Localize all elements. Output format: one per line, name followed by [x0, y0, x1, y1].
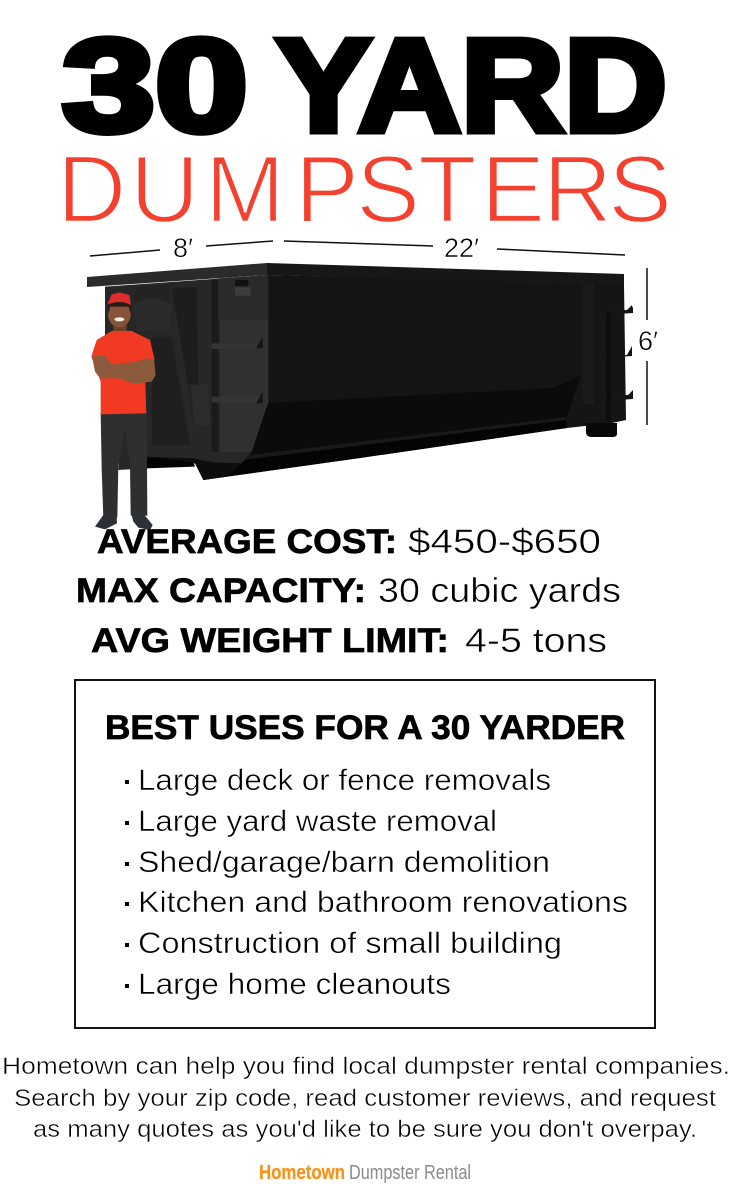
closing paragraph: Search by your zip code, read customer reviews, and request — [14, 1085, 716, 1112]
bullet list: Large yard waste removal — [138, 805, 497, 838]
title: 30 YARD — [62, 12, 667, 159]
stat: average cost: $450-$650 — [408, 523, 601, 561]
dimension: width 8 feet: 8′ — [173, 233, 193, 263]
stat: weight limit: 4-5 tons — [465, 622, 607, 660]
bullet list: Shed/garage/barn demolition — [138, 846, 550, 879]
dumpster long side — [203, 275, 624, 480]
red cap — [107, 292, 131, 305]
right end frame — [566, 283, 626, 423]
crossed arms — [92, 355, 156, 384]
logo: Hometown Dumpster Rental: Dumpster Rental — [349, 1162, 471, 1184]
stat: average cost — [97, 523, 601, 561]
dumpster illustration — [87, 263, 633, 480]
neck — [113, 323, 127, 335]
jeans — [101, 411, 147, 518]
bottom rail — [203, 420, 567, 480]
bullet list: Large home cleanouts — [138, 968, 451, 1001]
dumpster end face — [105, 275, 268, 480]
logo: Hometown Dumpster Rental — [259, 1162, 471, 1184]
title: 30 YARD: YARD — [276, 12, 667, 159]
closing paragraph: Hometown can help you find local dumpster rental companies. — [2, 1053, 730, 1080]
title: 30 YARD: 30 — [62, 12, 248, 159]
bullet list — [125, 764, 628, 1001]
dimension: length 22 feet — [284, 233, 625, 263]
closing paragraph — [2, 1053, 730, 1143]
logo: Hometown Dumpster Rental: Hometown — [259, 1162, 345, 1184]
red shirt — [91, 331, 155, 414]
closing paragraph: as many quotes as you'd like to be sure you don't overpay. — [33, 1116, 697, 1143]
head — [108, 299, 131, 327]
bullet list: Construction of small building — [138, 927, 562, 960]
panel heading: BEST USES FOR A 30 YARDER — [105, 709, 625, 747]
shoes — [95, 515, 117, 529]
panel border — [75, 680, 655, 1028]
stat: max capacity — [76, 572, 621, 610]
stat: weight limit — [91, 622, 607, 660]
panel: best uses — [75, 680, 655, 1028]
bullet list: Large deck or fence removals — [138, 764, 551, 797]
stat: average cost: AVERAGE COST: — [97, 523, 397, 561]
dimension: height 6 feet: 6′ — [638, 326, 658, 356]
person in red shirt — [91, 292, 156, 530]
lower sloped panel — [242, 376, 580, 458]
top rim — [87, 263, 267, 287]
stat: max capacity: MAX CAPACITY: — [76, 572, 366, 610]
bullet list: Kitchen and bathroom renovations — [138, 886, 628, 919]
subtitle: DUMPSTERS: DUMPSTERS — [57, 136, 672, 243]
stat: max capacity: 30 cubic yards — [378, 572, 621, 610]
stat: weight limit: AVG WEIGHT LIMIT: — [91, 622, 449, 660]
dimension: length 22 feet: 22′ — [444, 233, 479, 263]
wheel — [586, 423, 617, 437]
dimension: width 8 feet — [90, 233, 273, 263]
